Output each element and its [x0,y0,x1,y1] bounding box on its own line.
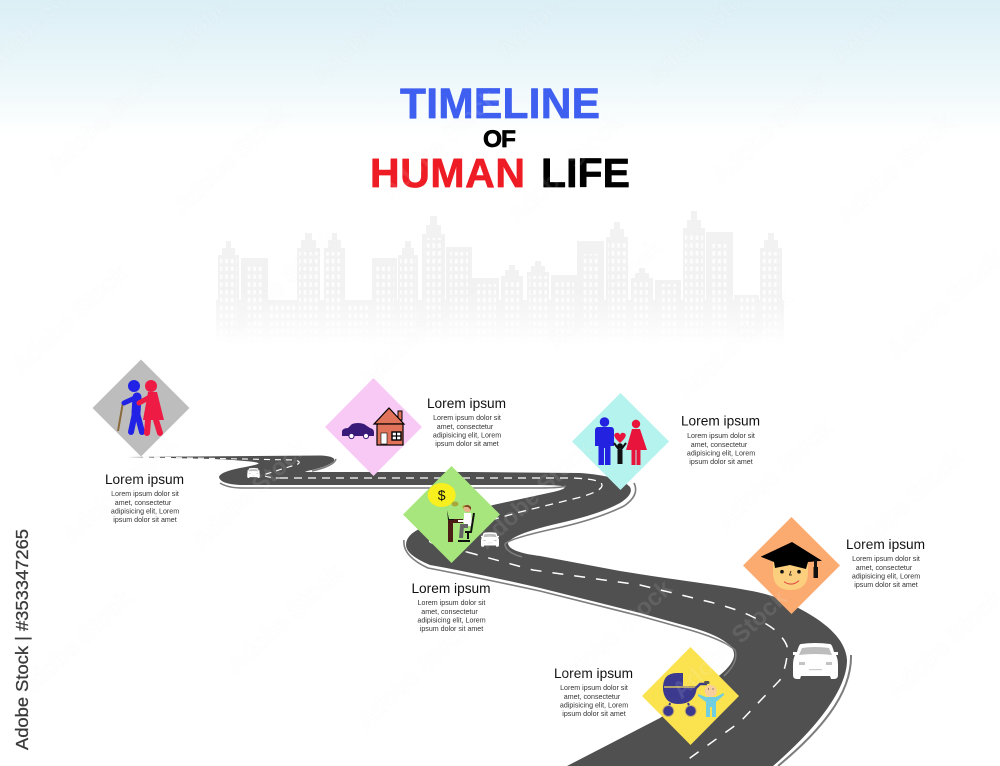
title line: OF: OF [483,126,516,153]
caption: adipisicing elit, Lorem [417,616,486,624]
stock watermarks: Adobe Stock [552,574,678,694]
caption: Lorem ipsum [105,472,184,487]
car: small far [247,468,260,478]
caption: amet, consectetur [856,564,913,572]
title [370,81,630,196]
icon: family with heart [595,417,647,465]
caption: ipsum dolor sit amet [562,710,626,718]
stock watermarks: Adobe Stock [842,444,968,564]
stock watermarks: Adobe Stock [187,434,313,554]
milestone: old age [92,360,190,524]
cars on road [247,468,838,679]
stock watermarks: Adobe Stock [7,259,133,379]
car: large near [793,643,838,679]
title line: HUMAN LIFE [370,150,630,196]
caption: amet, consectetur [437,423,494,431]
stock watermarks: Adobe Stock [542,234,668,354]
diamond [642,647,739,745]
diamond [92,360,190,456]
stock watermarks: Adobe Stock [168,99,294,219]
stock watermarks: Adobe Stock [222,559,348,679]
icon: man at desk dreaming of money: $ [438,487,446,503]
city skyline [216,211,784,345]
caption: Lorem ipsum [681,414,760,428]
caption: Lorem ipsum dolor sit [687,432,755,440]
car: middle [481,532,499,547]
caption: amet, consectetur [691,441,748,449]
milestone: family [572,393,760,490]
caption [105,472,184,524]
caption: adipisicing elit, Lorem [111,508,179,516]
caption: Lorem ipsum [427,396,506,411]
caption: Lorem ipsum [411,581,491,596]
caption: Lorem ipsum dolor sit [111,490,179,498]
icon: car and house [342,408,404,445]
stock watermarks: Adobe Stock [707,69,833,189]
stock watermarks: Adobe Stock [377,84,503,204]
stock watermarks: Adobe Stock [712,414,838,534]
road centre dashes [143,457,788,763]
stock watermarks: Adobe Stock [672,284,798,404]
caption [411,581,491,633]
stock watermarks: Adobe Stock [352,274,478,394]
icon: elderly couple [118,380,164,433]
caption: Lorem ipsum [846,537,925,552]
caption: ipsum dolor sit amet [113,516,177,524]
caption: Lorem ipsum [554,666,633,681]
caption: adipisicing elit, Lorem [852,572,920,580]
title line: TIMELINE: TIMELINE [400,81,600,128]
caption [554,666,633,718]
background sky gradient [0,0,1000,136]
winding road [127,456,851,766]
stock watermarks: Adobe Stock [667,584,793,704]
caption: Lorem ipsum dolor sit [418,599,485,607]
caption [681,414,760,466]
caption: adipisicing elit, Lorem [560,702,628,710]
caption: amet, consectetur [564,693,621,701]
caption: Lorem ipsum dolor sit [433,414,501,422]
stock watermarks: Adobe Stock [352,614,478,734]
stock watermarks: Adobe Stock [217,224,343,344]
diamond [572,393,669,490]
icon: man at desk dreaming of money [428,483,474,542]
stock watermarks: Adobe Stock [12,584,138,704]
title line: HUMAN LIFE: LIFE [541,150,630,196]
road shoulder lines [220,459,851,766]
caption [427,396,506,448]
stock watermarks: Adobe Stock [472,434,598,554]
stock watermarks: Adobe Stock [42,59,168,179]
milestone: work [403,466,500,633]
diamond [403,466,500,563]
caption: amet, consectetur [421,608,478,616]
stock watermarks: Adobe Stock [57,429,183,549]
caption [846,537,925,589]
icon: pram and baby [663,673,724,717]
milestone: birth [554,647,739,745]
milestone: home and car [325,378,506,476]
caption: adipisicing elit, Lorem [433,432,501,440]
caption: ipsum dolor sit amet [435,440,499,448]
caption: Lorem ipsum dolor sit [560,684,628,692]
caption: ipsum dolor sit amet [689,458,753,466]
stock watermarks: Adobe Stock [832,109,958,229]
road surface [127,456,847,766]
title line: HUMAN LIFE: HUMAN [370,150,525,196]
caption: amet, consectetur [115,499,172,507]
caption: ipsum dolor sit amet [420,625,483,633]
caption: ipsum dolor sit amet [854,581,918,589]
stock watermarks: Adobe Stock [502,109,628,229]
diamond [743,517,840,614]
milestone: graduation [743,517,925,614]
vertical stock credit: Adobe Stock | #353347265 [12,529,32,750]
diamond [325,378,422,476]
caption: Lorem ipsum dolor sit [852,555,920,563]
icon: graduate face [761,542,822,590]
caption: adipisicing elit, Lorem [687,450,755,458]
